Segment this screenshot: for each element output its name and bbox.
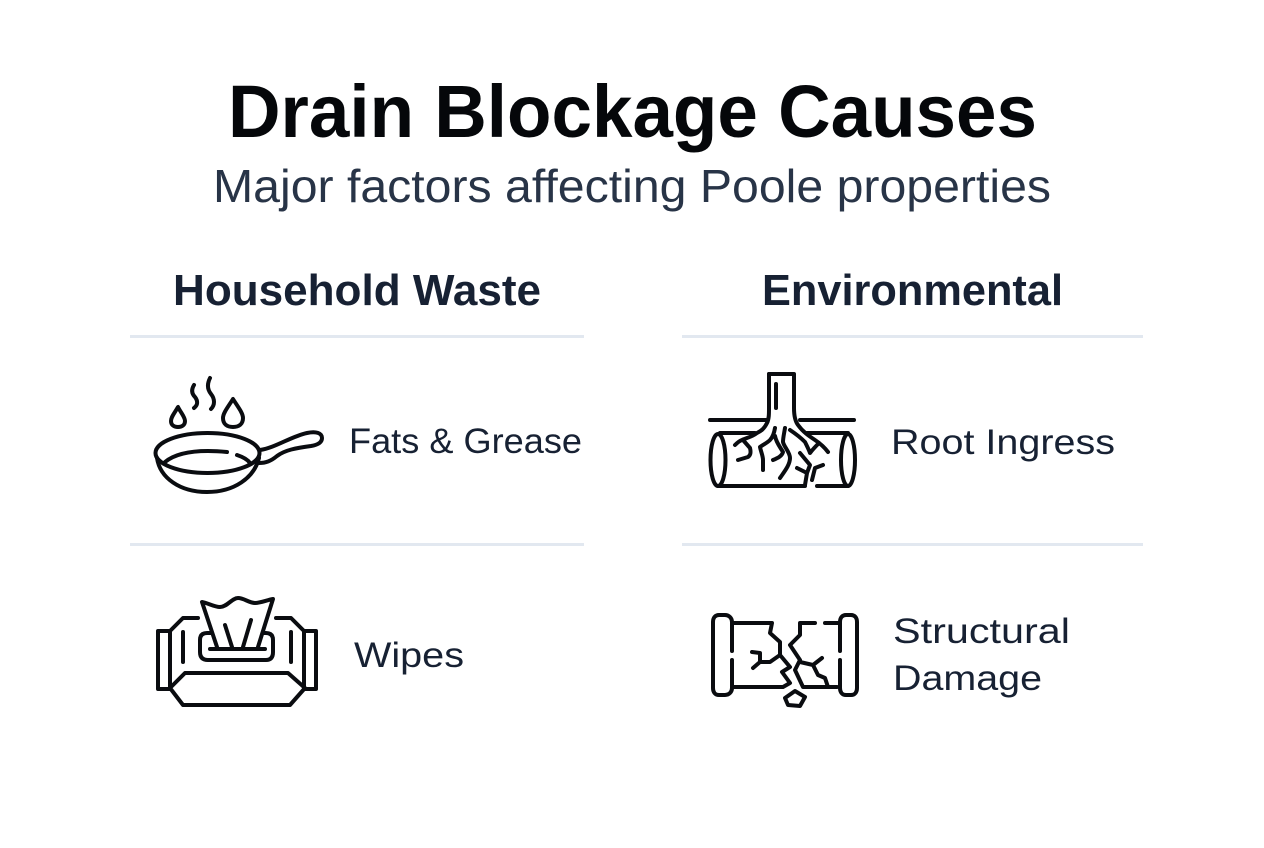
panel: environmental (682, 266, 1143, 706)
title: Drain Blockage Causes (228, 70, 1037, 153)
subtitle: Major factors affecting Poole properties (213, 160, 1051, 212)
label: structural damage: Damage (893, 659, 1042, 698)
label: structural damage: Structural (893, 612, 1070, 651)
label: wipes: Wipes (354, 636, 464, 675)
label: root ingress: Root Ingress (891, 423, 1115, 462)
label: fats and grease: Fats & Grease (349, 422, 582, 461)
icon: cracked pipe (713, 615, 857, 706)
heading: environmental: Environmental (762, 266, 1063, 315)
label: structural damage (893, 612, 1070, 698)
heading: household waste: Household Waste (173, 266, 541, 315)
icon: roots breaking into pipe (710, 374, 855, 486)
icon: pack of wipes (158, 598, 316, 705)
panel: household waste (130, 266, 584, 705)
icon: frying pan with steam and drops (156, 378, 322, 492)
